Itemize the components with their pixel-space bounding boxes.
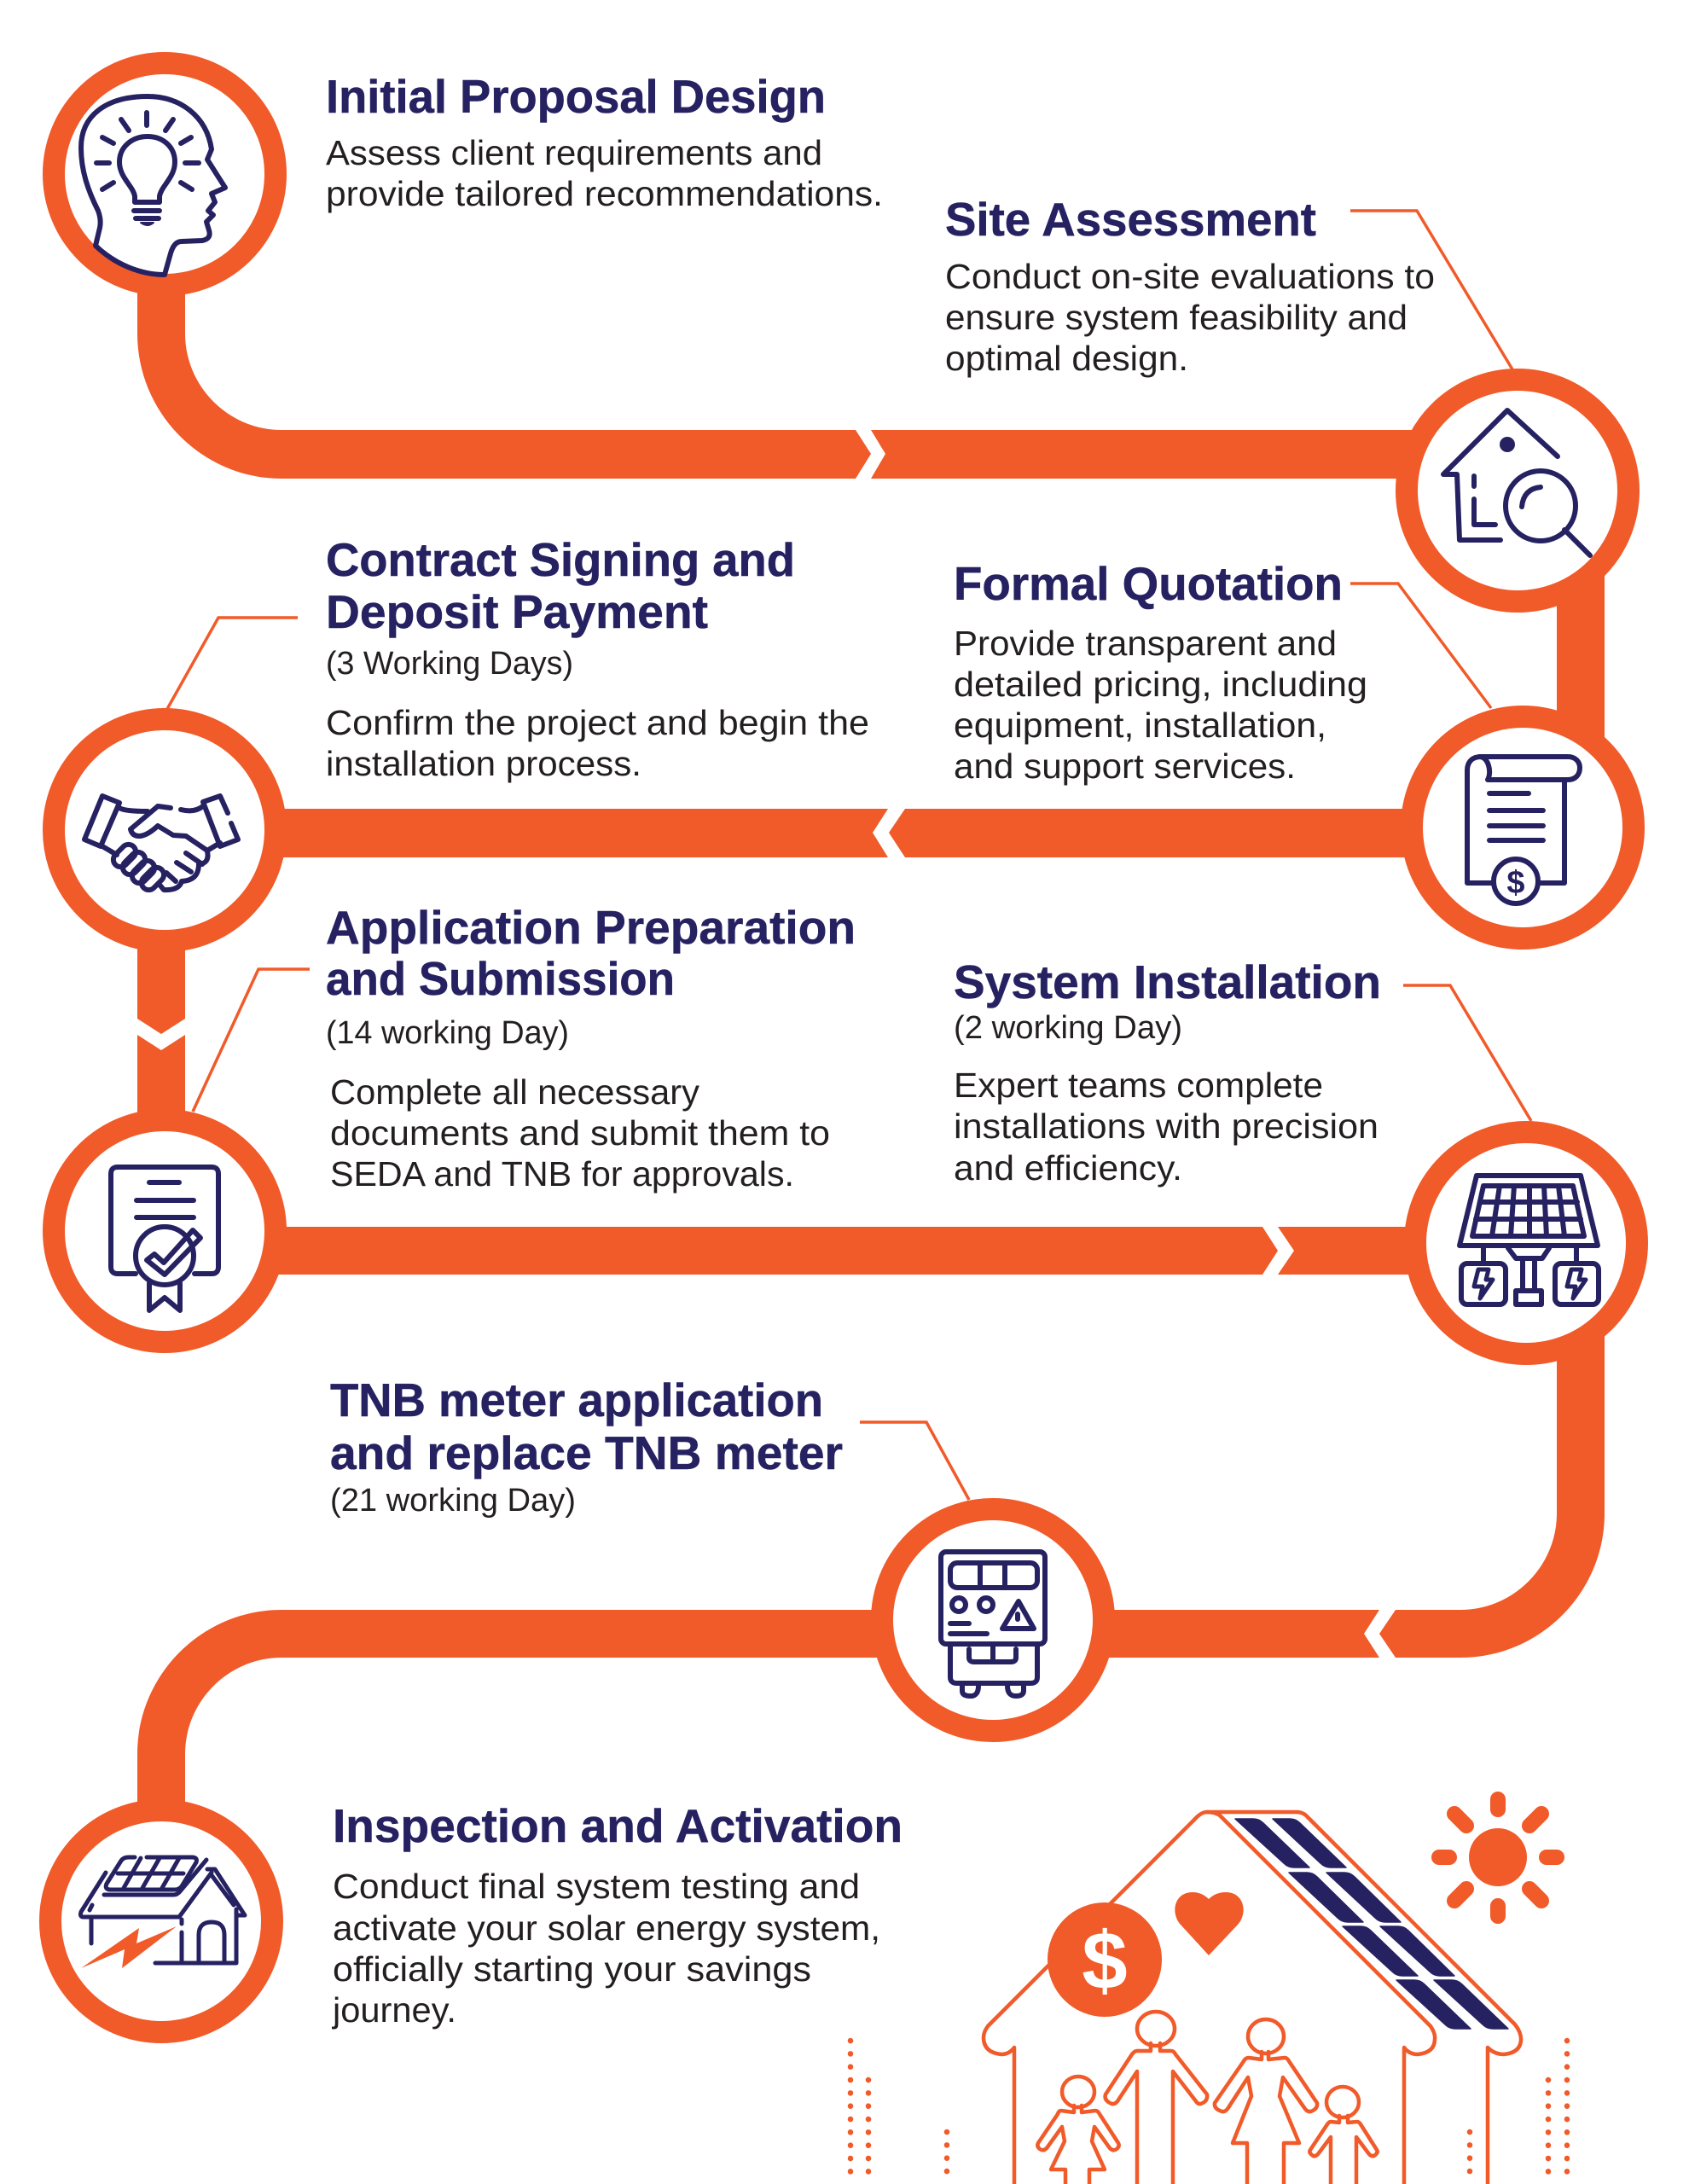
description: step 3: Provide transparent and	[954, 624, 1337, 663]
ring: step 3	[1412, 717, 1634, 938]
icon: house with magnifier	[1443, 410, 1590, 555]
icon: quotation document: $	[1506, 865, 1525, 901]
duration: 2 working days: (2 working Day)	[954, 1010, 1182, 1046]
step 4: contract signing and deposit payment	[54, 533, 869, 941]
description: step 8: activate your solar energy system,	[333, 1908, 880, 1948]
ring: step 8	[50, 1810, 272, 2032]
description: step 4: installation process.	[326, 744, 641, 783]
icon: handshake	[84, 796, 238, 893]
heading: TNB meter application and replace TNB meter: and replace TNB meter	[330, 1426, 843, 1479]
heading: contract signing and deposit payment: Deposit Payment	[326, 585, 708, 638]
daughter	[1037, 2077, 1119, 2184]
heading: application preparation and submission: and Submission	[326, 952, 675, 1005]
description: step 2: optimal design.	[945, 339, 1188, 378]
icon: sun	[1439, 1799, 1557, 1916]
process path	[137, 290, 1605, 1826]
step 1: initial proposal design	[54, 63, 883, 285]
description: step 2	[945, 257, 1435, 378]
heading: inspection and activation: Inspection and Activation	[333, 1799, 903, 1852]
description: step 3: and support services.	[954, 746, 1296, 786]
description: step 5	[330, 1072, 830, 1194]
heading: application preparation and submission: Application Preparation	[326, 901, 856, 954]
heading: contract signing and deposit payment: Contract Signing and	[326, 533, 795, 586]
illustration: family under solar house	[850, 1799, 1567, 2184]
description: step 3: detailed pricing, including	[954, 665, 1367, 704]
step 3: formal quotation	[954, 557, 1634, 938]
house outline	[984, 1812, 1521, 2184]
callout connector lines	[167, 211, 1531, 1500]
solar panels	[1235, 1819, 1508, 2029]
step 8: inspection and activation	[50, 1799, 903, 2032]
icon: solar panel with batteries	[1460, 1176, 1599, 1304]
description: step 4	[326, 703, 869, 783]
step 2: site assessment	[945, 193, 1628, 601]
ring: step 2	[1407, 380, 1628, 601]
icon: house with solar roof and bolt	[80, 1857, 245, 1968]
ring: step 7	[882, 1509, 1104, 1731]
description: step 6: Expert teams complete	[954, 1066, 1323, 1105]
heading: TNB meter application and replace TNB meter: TNB meter application	[330, 1374, 823, 1426]
description: step 8: officially starting your savings	[333, 1949, 811, 1989]
heading: system installation: System Installation	[954, 956, 1381, 1008]
icon: electricity meter	[941, 1552, 1045, 1696]
duration: 3 working days: (3 Working Days)	[326, 646, 573, 682]
description: step 1	[326, 133, 883, 213]
description: step 2: ensure system feasibility and	[945, 298, 1408, 337]
description: step 6: installations with precision	[954, 1107, 1378, 1146]
heading: application preparation and submission	[326, 901, 856, 1005]
description: step 8: Conduct final system testing and	[333, 1867, 860, 1906]
ring: step 6	[1415, 1132, 1637, 1354]
heading: formal quotation: Formal Quotation	[954, 557, 1343, 610]
ring: step 4	[54, 719, 276, 941]
description: step 3: equipment, installation,	[954, 706, 1326, 745]
description: step 6: and efficiency.	[954, 1148, 1182, 1188]
icon: quotation document	[1467, 757, 1580, 903]
description: step 6	[954, 1066, 1378, 1188]
father	[1106, 2012, 1207, 2184]
description: step 1: provide tailored recommendations.	[326, 174, 883, 213]
step 7: TNB meter application	[330, 1374, 1104, 1731]
son	[1309, 2087, 1378, 2184]
heading: contract signing and deposit payment	[326, 533, 795, 638]
duration: 14 working days: (14 working Day)	[326, 1015, 569, 1051]
icon: certificate with seal	[111, 1167, 218, 1310]
description: step 4: Confirm the project and begin the	[326, 703, 869, 742]
heading: initial proposal design: Initial Proposal Design	[326, 70, 826, 123]
description: step 2: Conduct on-site evaluations to	[945, 257, 1435, 296]
description: step 8: journey.	[332, 1990, 456, 2030]
duration: 21 working days: (21 working Day)	[330, 1483, 576, 1519]
step 5: application preparation and submission	[54, 901, 856, 1342]
mother	[1215, 2019, 1317, 2184]
heading: TNB meter application and replace TNB meter	[330, 1374, 843, 1479]
description: step 1: Assess client requirements and	[326, 133, 822, 172]
description: step 5: SEDA and TNB for approvals.	[330, 1154, 794, 1194]
family figures	[1037, 2012, 1378, 2184]
dotted columns	[850, 2041, 1567, 2184]
ring: step 5	[54, 1120, 276, 1342]
ring: step 1	[54, 63, 276, 285]
description: step 5: documents and submit them to	[330, 1113, 830, 1153]
step 6: system installation	[954, 956, 1637, 1354]
coin with dollar sign: $	[1082, 1915, 1128, 2007]
coin with dollar sign	[1048, 1902, 1162, 2017]
description: step 3	[954, 624, 1367, 786]
description: step 8	[332, 1867, 880, 2030]
heading: site assessment: Site Assessment	[945, 193, 1316, 246]
description: step 5: Complete all necessary	[330, 1072, 700, 1112]
icon: heart	[1175, 1892, 1244, 1955]
icon: head with light bulb	[81, 96, 225, 275]
